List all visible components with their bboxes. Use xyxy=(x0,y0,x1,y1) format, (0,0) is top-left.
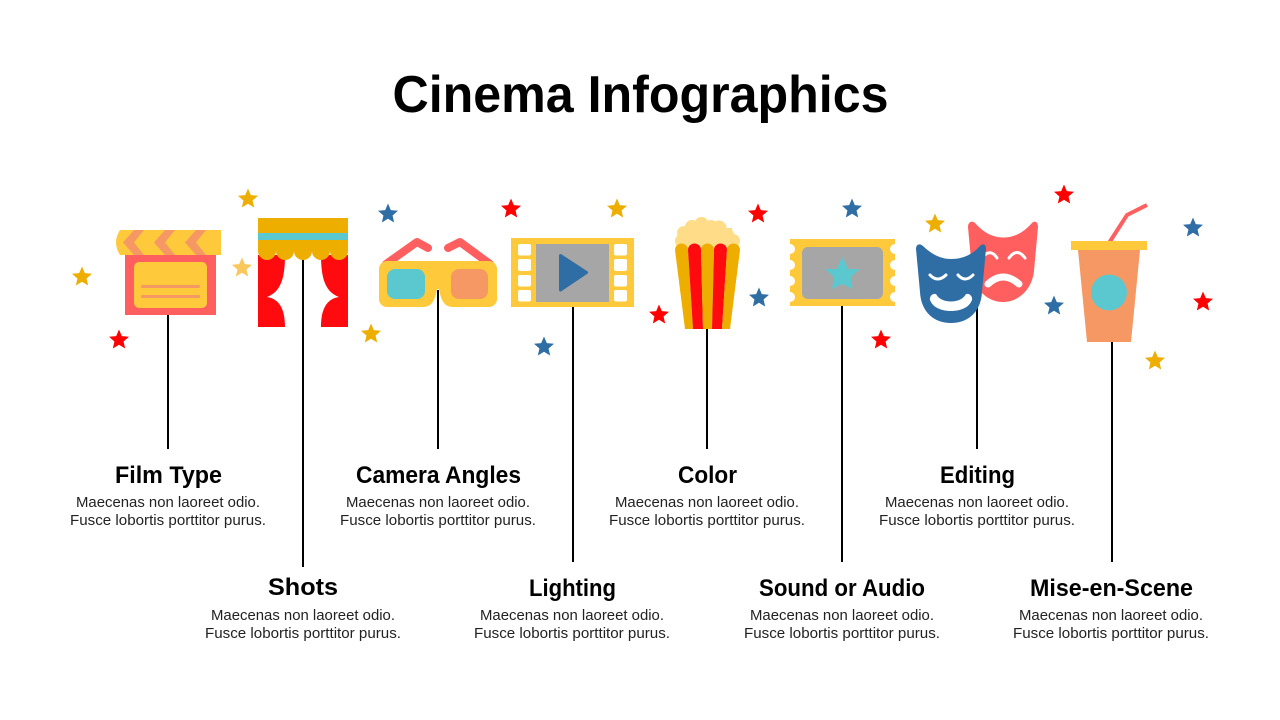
label: Shots: Fusce lobortis porttitor purus. xyxy=(205,626,401,642)
label: Color xyxy=(609,462,805,529)
label: Film Type: Fusce lobortis porttitor purus. xyxy=(70,513,266,529)
label: Mise-en-Scene: Mise-en-Scene xyxy=(1030,575,1193,602)
label: Camera Angles: Fusce lobortis porttitor purus. xyxy=(340,513,536,529)
label: Film Type: Film Type xyxy=(115,462,222,489)
label: Sound or Audio: Fusce lobortis porttitor purus. xyxy=(744,626,940,642)
label: Shots xyxy=(205,574,401,642)
label: Shots: Maecenas non laoreet odio. xyxy=(211,608,395,624)
icon: ticket with star xyxy=(790,239,895,306)
label: Editing: Editing xyxy=(940,462,1015,489)
label: Lighting: Lighting xyxy=(529,575,616,602)
label: Mise-en-Scene: Fusce lobortis porttitor purus. xyxy=(1013,626,1209,642)
label: Editing xyxy=(879,462,1075,529)
icon: drink cup with straw xyxy=(1071,205,1147,342)
label: Editing: Maecenas non laoreet odio. xyxy=(885,495,1069,511)
label: Sound or Audio xyxy=(744,575,940,642)
sad mask xyxy=(968,222,1038,302)
label: Editing: Fusce lobortis porttitor purus. xyxy=(879,513,1075,529)
icon: film strip with play button xyxy=(511,238,634,307)
label: Camera Angles xyxy=(340,462,536,529)
label: Shots: Shots xyxy=(268,574,338,601)
label: Camera Angles: Maecenas non laoreet odio. xyxy=(346,495,530,511)
label: Mise-en-Scene: Maecenas non laoreet odio. xyxy=(1019,608,1203,624)
label: Mise-en-Scene xyxy=(1013,575,1209,642)
label: Film Type: Maecenas non laoreet odio. xyxy=(76,495,260,511)
label: Lighting xyxy=(474,575,670,642)
label: Lighting: Maecenas non laoreet odio. xyxy=(480,608,664,624)
label: Lighting: Fusce lobortis porttitor purus. xyxy=(474,626,670,642)
label: Sound or Audio: Maecenas non laoreet odio. xyxy=(750,608,934,624)
label: Camera Angles: Camera Angles xyxy=(356,462,521,489)
decorative stars xyxy=(72,184,1213,369)
icon: theatre masks xyxy=(916,222,1038,323)
label: Color: Maecenas non laoreet odio. xyxy=(615,495,799,511)
label: Sound or Audio: Sound or Audio xyxy=(759,575,925,602)
label: Color: Color xyxy=(678,462,737,489)
icon: clapperboard xyxy=(116,230,221,315)
connector lines xyxy=(168,260,1112,567)
icon: popcorn bucket xyxy=(675,217,740,329)
happy mask xyxy=(916,244,986,323)
label: Film Type xyxy=(70,462,266,529)
title: Cinema Infographics xyxy=(392,66,888,124)
icon: theatre curtain xyxy=(258,218,348,327)
icon: 3D glasses xyxy=(379,242,497,307)
label: Color: Fusce lobortis porttitor purus. xyxy=(609,513,805,529)
